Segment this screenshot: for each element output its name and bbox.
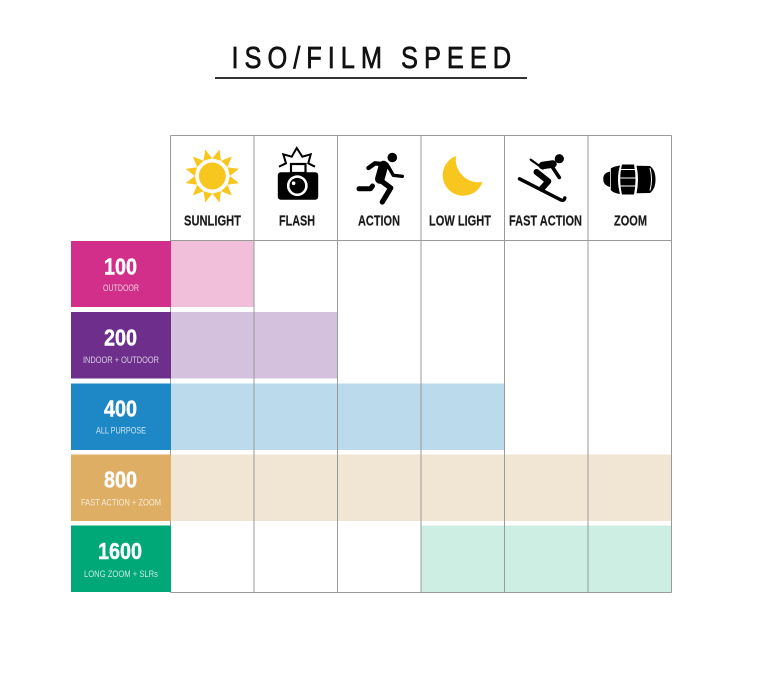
icon: camera flash bbox=[278, 148, 318, 200]
label: action: ACTION bbox=[358, 212, 400, 230]
row label: 1600 long zoom + slrs: 1600 bbox=[98, 538, 142, 564]
row label: 200 indoor + outdoor bbox=[71, 312, 171, 378]
icon: skier bbox=[520, 154, 565, 200]
row label: 1600 long zoom + slrs: LONG ZOOM + SLRs bbox=[84, 569, 158, 579]
label: zoom: ZOOM bbox=[614, 212, 647, 230]
icon: crescent moon bbox=[443, 156, 482, 196]
row label: 200 indoor + outdoor: INDOOR + OUTDOOR bbox=[83, 355, 159, 365]
label: sunlight: SUNLIGHT bbox=[184, 212, 241, 230]
row label: 100 outdoor bbox=[71, 241, 171, 307]
row label: 400 all purpose: ALL PURPOSE bbox=[96, 426, 146, 436]
icon: sun bbox=[185, 148, 240, 204]
chart: film speed table bbox=[170, 136, 672, 592]
row fill: 100 bbox=[171, 241, 254, 307]
title: ISO/FILM SPEED bbox=[232, 41, 511, 76]
label: fast action: FAST ACTION bbox=[509, 212, 582, 230]
row fill: 800 bbox=[171, 454, 671, 521]
icon: running figure bbox=[359, 153, 402, 202]
row label: 800 fast action + zoom: 800 bbox=[104, 466, 137, 492]
row label: 800 fast action + zoom bbox=[71, 454, 171, 521]
icon: zoom lens bbox=[603, 164, 656, 194]
label: flash: FLASH bbox=[279, 212, 315, 230]
row label: 100 outdoor: OUTDOOR bbox=[103, 283, 139, 293]
row fill: 400 bbox=[171, 384, 504, 450]
row label: 100 outdoor: 100 bbox=[104, 254, 137, 280]
row label: 200 indoor + outdoor: 200 bbox=[104, 324, 137, 350]
row label: 400 all purpose bbox=[71, 384, 171, 450]
row label: 400 all purpose: 400 bbox=[104, 396, 137, 422]
row label: 800 fast action + zoom: FAST ACTION + ZOOM bbox=[81, 498, 161, 508]
label: low light: LOW LIGHT bbox=[429, 212, 491, 230]
row fill: 1600 bbox=[421, 526, 671, 592]
row fill: 200 bbox=[171, 312, 338, 378]
row label: 1600 long zoom + slrs bbox=[71, 526, 171, 592]
